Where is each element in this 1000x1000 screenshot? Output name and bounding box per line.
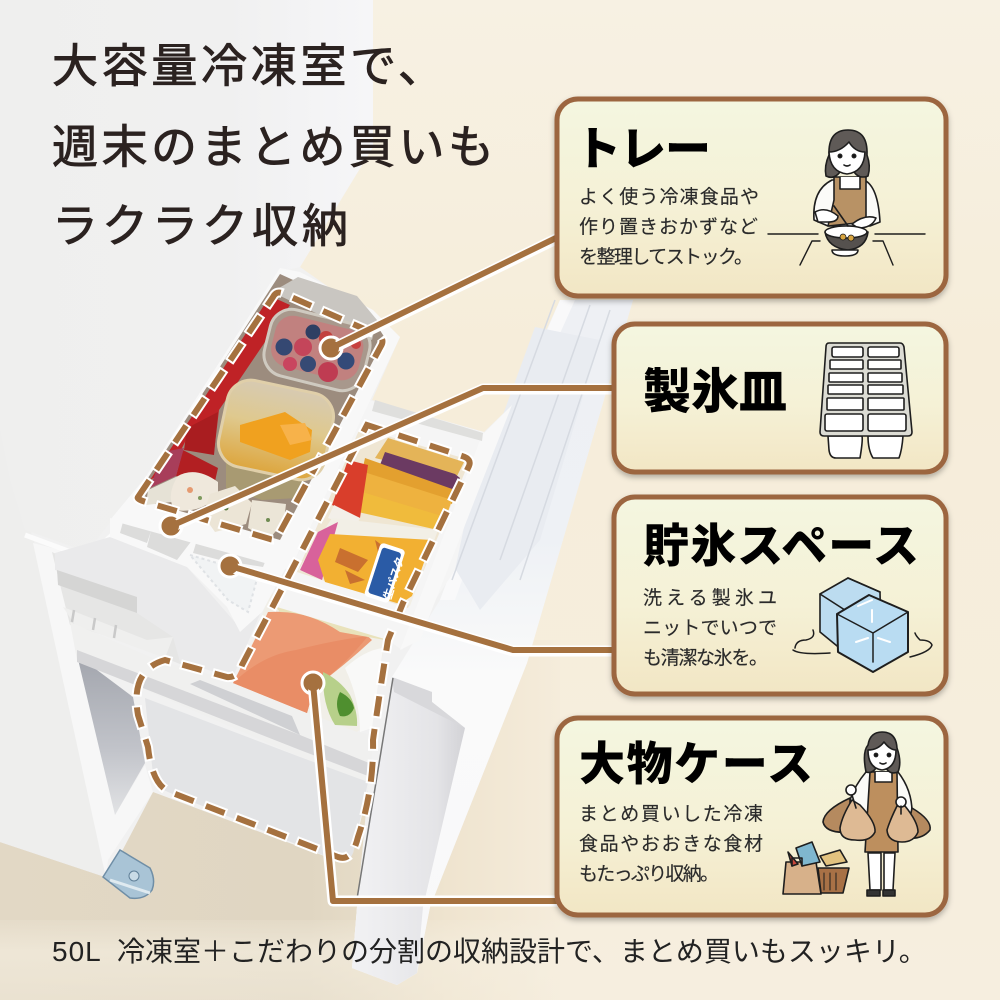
glass container: berries <box>259 305 375 395</box>
description: large case <box>579 803 763 885</box>
freezer inner shelf <box>52 552 240 668</box>
big case front <box>145 698 368 862</box>
red box <box>150 296 290 480</box>
fridge front strip <box>33 543 153 878</box>
description: ice storage: 洗える製氷ユ <box>643 587 777 609</box>
fridge silhouette <box>0 0 633 985</box>
small package <box>146 476 178 505</box>
icon: woman cooking <box>768 130 925 265</box>
icon: ice tray <box>820 343 912 458</box>
description: ice storage: も清潔な氷を。 <box>643 647 768 669</box>
bottom haze <box>0 920 560 1000</box>
heading: ice tray: 製氷皿 <box>643 366 787 419</box>
dashed outline: tray <box>138 292 382 540</box>
description: large case: まとめ買いした冷凍 <box>579 803 763 825</box>
right door <box>352 300 633 985</box>
panel: ice storage <box>614 497 946 694</box>
floor <box>0 640 560 1000</box>
heading: ice storage: 貯氷スペース <box>643 520 919 572</box>
rice balls <box>171 472 286 540</box>
leader line: large case <box>302 672 560 901</box>
footer caption: 50L <box>52 936 109 967</box>
dashed outline: ice storage and large case <box>137 425 470 858</box>
panel: large case <box>557 718 946 915</box>
bottom recess <box>77 655 145 815</box>
description: ice storage <box>643 587 777 669</box>
title: 週末のまとめ買いも <box>52 121 494 173</box>
leader line: ice tray <box>160 388 616 537</box>
lower freezer tray <box>270 398 512 650</box>
pasta label <box>364 542 410 605</box>
icon: ice cubes <box>793 578 932 672</box>
foot bracket <box>103 850 154 898</box>
panel: tray <box>557 99 946 296</box>
heading: large case: 大物ケース <box>579 738 813 790</box>
leader line: ice storage <box>219 555 616 651</box>
description: tray: を整理してストック。 <box>579 246 753 268</box>
pasta label: 生パスタ <box>380 555 407 601</box>
big case rim <box>70 622 374 790</box>
upper tray <box>110 268 400 570</box>
description: tray <box>579 186 759 268</box>
panel: ice tray <box>614 324 946 472</box>
icon: woman with shopping bags <box>783 732 930 896</box>
description: tray: よく使う冷凍食品や <box>579 186 759 208</box>
footer caption: 冷凍室＋こだわりの分割の収納設計で、まとめ買いもスッキリ。 <box>117 936 927 967</box>
title <box>52 40 494 252</box>
description: large case: 食品やおおきな食材 <box>579 833 763 855</box>
refrigerator photo <box>0 0 633 985</box>
door <box>0 0 373 552</box>
title: 大容量冷凍室で、 <box>52 40 444 92</box>
description: large case: もたっぷり収納。 <box>579 863 719 885</box>
leader line: tray <box>320 236 560 359</box>
fridge side <box>0 430 108 878</box>
title: ラクラク収納 <box>52 200 348 252</box>
glass container: mango <box>214 376 338 484</box>
description: tray: 作り置きおかずなど <box>579 216 758 238</box>
frozen food bags <box>298 438 464 606</box>
stacked glass <box>226 462 304 500</box>
door lip <box>25 535 112 558</box>
description: ice storage: ニットでいつで <box>643 618 777 639</box>
salmon package <box>233 593 387 732</box>
ice tray front <box>55 507 290 677</box>
heading: tray: トレー <box>575 123 711 175</box>
lower door panel <box>352 677 465 985</box>
